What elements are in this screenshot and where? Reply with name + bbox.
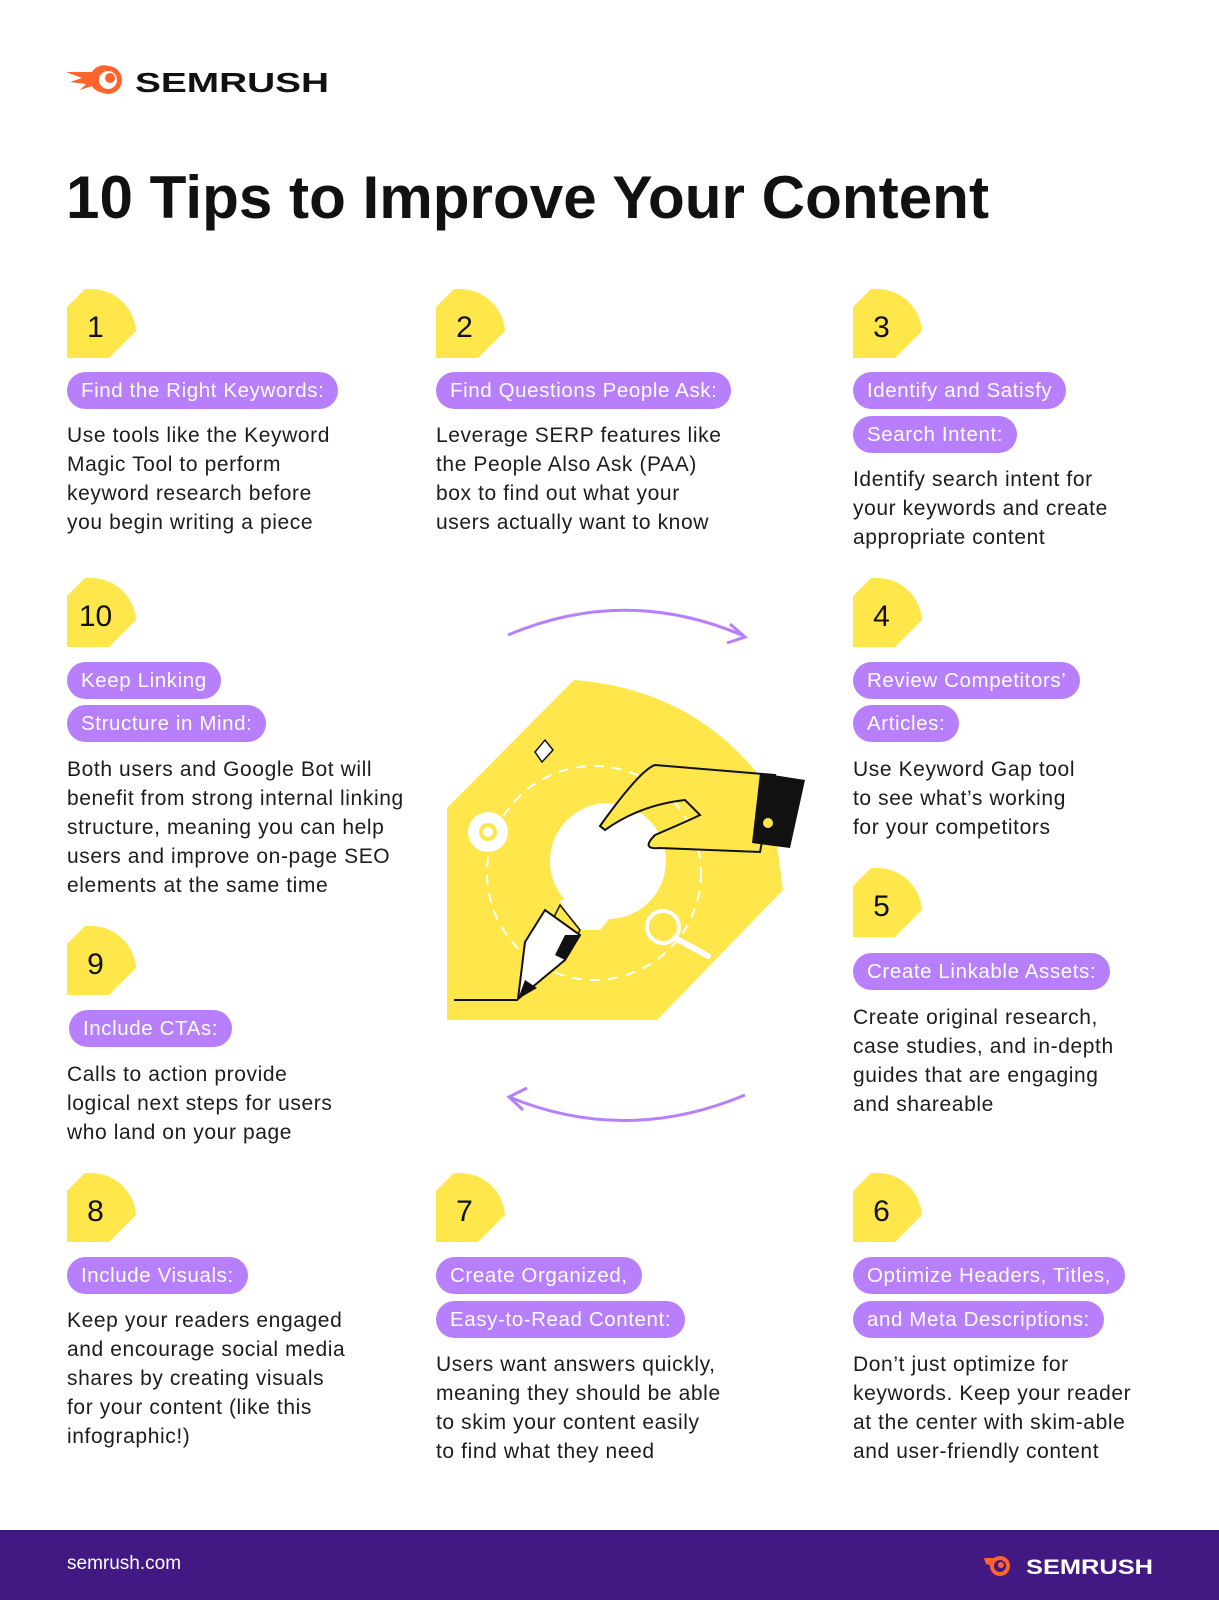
badge 5 bbox=[853, 868, 922, 937]
text 9 bbox=[67, 1063, 332, 1144]
pill 2 bbox=[436, 372, 731, 409]
text 10: Both users and Google Bot will bbox=[67, 758, 372, 781]
text 10: benefit from strong internal linking bbox=[67, 787, 404, 810]
tip 7: Easy-to-Read Content: bbox=[450, 1308, 671, 1331]
title: 10 Tips to Improve Your Content bbox=[66, 164, 989, 231]
badge 10 bbox=[67, 578, 136, 647]
text 1 bbox=[67, 424, 330, 534]
badge 7: 7 bbox=[456, 1195, 473, 1228]
text 1: Magic Tool to perform bbox=[67, 453, 281, 476]
text 10: structure, meaning you can help bbox=[67, 816, 384, 839]
text 8: infographic!) bbox=[67, 1425, 190, 1448]
text 2: box to find out what your bbox=[436, 482, 680, 505]
tip 1 bbox=[67, 289, 338, 534]
pill 6 bbox=[853, 1257, 1125, 1294]
pill 2: Find Questions People Ask: bbox=[450, 379, 717, 402]
pill 9 bbox=[69, 1010, 232, 1047]
text 6: Don’t just optimize for bbox=[853, 1353, 1069, 1376]
badge 3: 3 bbox=[873, 311, 890, 344]
badge 1: 1 bbox=[87, 311, 104, 344]
text 5: and shareable bbox=[853, 1093, 994, 1116]
pill 8: Include Visuals: bbox=[81, 1264, 234, 1287]
text 5: case studies, and in-depth bbox=[853, 1035, 1114, 1058]
text 9: who land on your page bbox=[67, 1121, 292, 1144]
tip 7 bbox=[436, 1173, 721, 1463]
badge 2 bbox=[436, 289, 505, 358]
text 1: keyword research before bbox=[67, 482, 312, 505]
text 7: to find what they need bbox=[436, 1440, 655, 1463]
footer bbox=[0, 1530, 1219, 1600]
text 5 bbox=[853, 1006, 1114, 1116]
pill 9: Include CTAs: bbox=[83, 1017, 218, 1040]
text 1: you begin writing a piece bbox=[67, 511, 313, 534]
tip 6: and Meta Descriptions: bbox=[867, 1308, 1090, 1331]
text 7: Users want answers quickly, bbox=[436, 1353, 716, 1376]
text 8: and encourage social media bbox=[67, 1338, 345, 1361]
text 7: to skim your content easily bbox=[436, 1411, 700, 1434]
text 9: logical next steps for users bbox=[67, 1092, 332, 1115]
text 4: Use Keyword Gap tool bbox=[853, 758, 1075, 781]
pill 1 bbox=[67, 372, 338, 409]
footer url: semrush.com bbox=[67, 1553, 181, 1574]
tip 3 bbox=[853, 289, 1108, 549]
pill 6: Optimize Headers, Titles, bbox=[867, 1264, 1111, 1287]
text 6: at the center with skim-able bbox=[853, 1411, 1125, 1434]
badge 5: 5 bbox=[873, 890, 890, 923]
text 4: to see what’s working bbox=[853, 787, 1066, 810]
logo bbox=[66, 65, 329, 98]
text 3: appropriate content bbox=[853, 526, 1045, 549]
tip 2 bbox=[436, 289, 731, 534]
text 8: shares by creating visuals bbox=[67, 1367, 324, 1390]
tip 4 bbox=[853, 578, 1080, 839]
tip 10 bbox=[67, 578, 404, 897]
logo: SEMRUSH bbox=[135, 67, 329, 98]
tip 10: Structure in Mind: bbox=[81, 712, 252, 735]
text 10: users and improve on-page SEO bbox=[67, 845, 390, 868]
pill 5: Create Linkable Assets: bbox=[867, 960, 1096, 983]
pill 1: Find the Right Keywords: bbox=[81, 379, 324, 402]
arrow: bottom bbox=[506, 1086, 746, 1122]
text 8 bbox=[67, 1309, 345, 1448]
pill 4: Review Competitors’ bbox=[867, 669, 1066, 692]
arrow: top bbox=[508, 608, 748, 644]
tip 5 bbox=[853, 868, 1114, 1116]
text 3 bbox=[853, 468, 1108, 549]
text 1: Use tools like the Keyword bbox=[67, 424, 330, 447]
badge 4 bbox=[853, 578, 922, 647]
text 7: meaning they should be able bbox=[436, 1382, 721, 1405]
badge 7 bbox=[436, 1173, 505, 1242]
text 5: Create original research, bbox=[853, 1006, 1098, 1029]
badge 6 bbox=[853, 1173, 922, 1242]
text 3: Identify search intent for bbox=[853, 468, 1093, 491]
badge 4: 4 bbox=[873, 600, 890, 633]
pill 7: Create Organized, bbox=[450, 1264, 628, 1287]
text 5: guides that are engaging bbox=[853, 1064, 1099, 1087]
text 2: the People Also Ask (PAA) bbox=[436, 453, 697, 476]
text 10: elements at the same time bbox=[67, 874, 328, 897]
badge 6: 6 bbox=[873, 1195, 890, 1228]
text 3: your keywords and create bbox=[853, 497, 1108, 520]
text 2 bbox=[436, 424, 721, 534]
badge 3 bbox=[853, 289, 922, 358]
pill 10: Keep Linking bbox=[81, 669, 207, 692]
pill 5 bbox=[853, 953, 1110, 990]
pill 8 bbox=[67, 1257, 248, 1294]
badge 2: 2 bbox=[456, 311, 473, 344]
text 6: keywords. Keep your reader bbox=[853, 1382, 1131, 1405]
text 7 bbox=[436, 1353, 721, 1463]
tip 9 bbox=[67, 926, 332, 1144]
pill 4 bbox=[853, 662, 1080, 699]
text 8: for your content (like this bbox=[67, 1396, 312, 1419]
text 4 bbox=[853, 758, 1075, 839]
text 8: Keep your readers engaged bbox=[67, 1309, 342, 1332]
tip 8 bbox=[67, 1173, 345, 1448]
badge 9 bbox=[67, 926, 136, 995]
badge 9: 9 bbox=[87, 948, 104, 981]
text 9: Calls to action provide bbox=[67, 1063, 287, 1086]
tip 3: Search Intent: bbox=[867, 423, 1003, 446]
pill 10 bbox=[67, 662, 221, 699]
footer logo: SEMRUSH bbox=[1026, 1556, 1153, 1579]
badge 10: 10 bbox=[79, 600, 112, 633]
footer logo bbox=[984, 1556, 1153, 1579]
badge 8: 8 bbox=[87, 1195, 104, 1228]
pill 3: Identify and Satisfy bbox=[867, 379, 1052, 402]
badge 1 bbox=[67, 289, 136, 358]
text 2: users actually want to know bbox=[436, 511, 709, 534]
text 2: Leverage SERP features like bbox=[436, 424, 721, 447]
text 4: for your competitors bbox=[853, 816, 1051, 839]
illustration: hand with pencil and bulb bbox=[447, 680, 805, 1020]
text 6 bbox=[853, 1353, 1131, 1463]
badge 8 bbox=[67, 1173, 136, 1242]
pill 3 bbox=[853, 372, 1066, 409]
text 6: and user-friendly content bbox=[853, 1440, 1099, 1463]
text 10 bbox=[67, 758, 404, 897]
tip 6 bbox=[853, 1173, 1131, 1463]
tip 4: Articles: bbox=[867, 712, 945, 735]
pill 7 bbox=[436, 1257, 642, 1294]
